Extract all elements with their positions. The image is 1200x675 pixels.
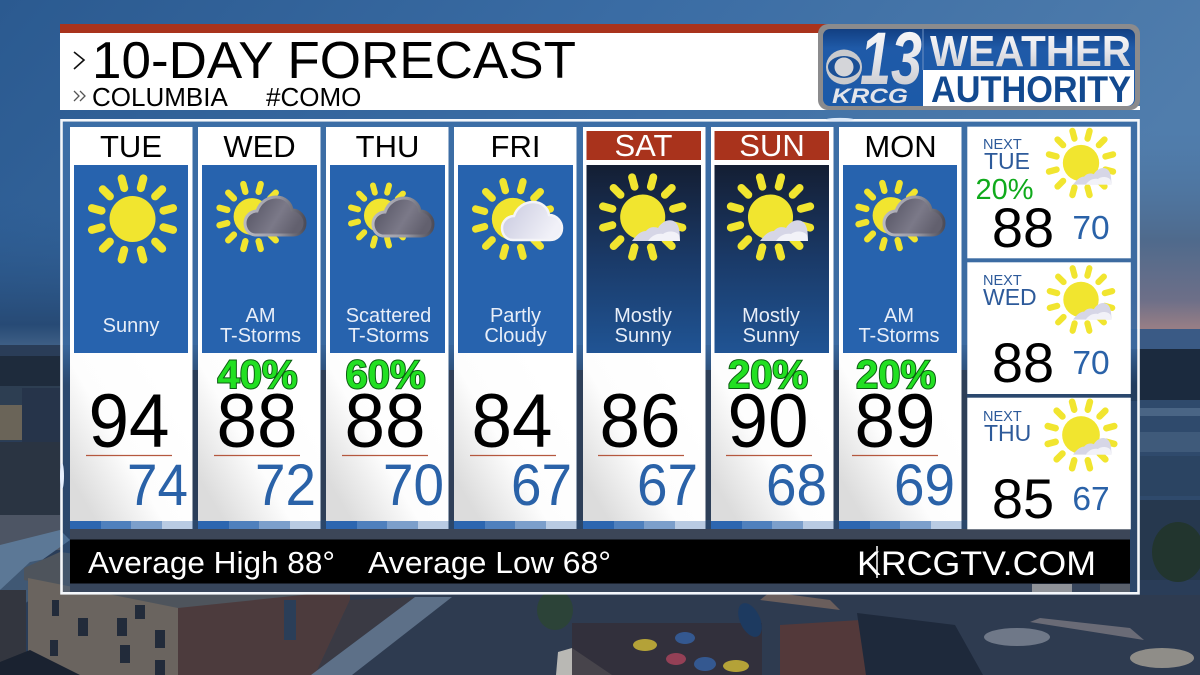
condition panel — [458, 165, 573, 353]
condition text: Sunny — [103, 315, 159, 337]
precipitation chance: 20% — [976, 174, 1034, 206]
channel number: 13 — [860, 17, 922, 100]
high temperature: 88 — [992, 331, 1054, 394]
panel: Tuesday — [70, 127, 192, 529]
WEATHER: WEATHER — [930, 27, 1131, 76]
icon: sun behind storm cloud — [351, 185, 433, 246]
low temperature: 67 — [511, 453, 572, 518]
white title plate — [60, 33, 830, 110]
panel: Monday — [839, 127, 962, 529]
condition text: Sunny — [743, 325, 799, 347]
condition panel — [843, 165, 957, 353]
condition panel — [74, 165, 188, 353]
website: KRCGTV.COM — [857, 545, 1096, 583]
day label: SUN — [739, 128, 805, 163]
station logo — [818, 17, 1140, 110]
panel: next Thursday — [967, 398, 1131, 530]
color strip — [711, 521, 834, 529]
high temperature: 90 — [728, 379, 808, 464]
color strip — [70, 521, 192, 529]
low temperature: 74 — [127, 453, 188, 518]
high temperature: 84 — [472, 379, 552, 464]
day label: FRI — [491, 129, 540, 164]
color strip — [583, 521, 706, 529]
low temperature: 70 — [1072, 345, 1110, 382]
condition text — [614, 305, 672, 347]
low temperature: 70 — [1072, 210, 1110, 247]
weekend day header — [714, 131, 829, 160]
high temperature: 88 — [344, 379, 426, 464]
low temperature: 68 — [766, 453, 827, 518]
condition text — [346, 305, 431, 347]
white frame outline — [62, 120, 1138, 593]
icon: sun behind white cloud — [476, 182, 562, 256]
CBS eye — [826, 50, 862, 84]
color strip — [839, 521, 962, 529]
panel: next Tuesday — [967, 127, 1131, 259]
frame light glints — [60, 118, 854, 489]
condition text: T-Storms — [348, 325, 429, 347]
condition panel — [330, 165, 445, 353]
average low: Average Low 68° — [368, 545, 611, 580]
average high: Average High 88° — [88, 545, 335, 580]
day label: WED — [983, 284, 1037, 310]
condition text: Cloudy — [484, 325, 547, 347]
condition text — [220, 305, 301, 347]
hashtag: #COMO — [266, 82, 361, 112]
icon: sun with small cloud — [1050, 268, 1112, 331]
AUTHORITY: AUTHORITY — [931, 69, 1131, 110]
condition text: Partly — [490, 305, 541, 327]
high temperature: 89 — [854, 379, 936, 464]
condition text — [742, 305, 800, 347]
icon: sun with small cloud — [1049, 131, 1113, 195]
panel: Friday — [454, 127, 576, 529]
panel: next Wednesday — [967, 262, 1131, 394]
color strip — [198, 521, 320, 529]
icon: sun with small cloud — [1048, 402, 1114, 468]
low temperature: 67 — [1072, 481, 1110, 518]
condition panel — [714, 165, 829, 353]
condition text: Sunny — [615, 325, 671, 347]
subtitle arrows — [74, 91, 85, 101]
header banner — [60, 24, 830, 112]
panel: Thursday — [326, 127, 448, 529]
color strip — [454, 521, 576, 529]
day label: TUE — [100, 129, 162, 164]
icon: sun behind storm cloud — [220, 184, 305, 249]
low temperature: 69 — [894, 453, 955, 518]
condition text: Scattered — [346, 305, 431, 327]
day label: THU — [356, 129, 419, 164]
condition text: T-Storms — [220, 325, 301, 347]
color strip — [326, 521, 448, 529]
condition text — [858, 305, 940, 347]
low temperature: 70 — [383, 453, 444, 518]
condition panel — [202, 165, 317, 353]
condition text: AM — [884, 305, 914, 327]
title arrow — [74, 52, 84, 69]
condition text: Mostly — [742, 305, 800, 327]
frame interior — [63, 122, 1137, 592]
high temperature: 88 — [216, 379, 298, 464]
day label: TUE — [984, 148, 1030, 174]
panel: Wednesday — [198, 127, 320, 529]
street and plaza — [311, 590, 1200, 675]
footer bar — [70, 540, 1130, 584]
brick building — [0, 552, 350, 675]
city strip visible inside frame — [70, 370, 1130, 592]
precipitation chance: 40% — [217, 353, 298, 397]
icon: sun with small cloud — [603, 177, 682, 257]
day label: THU — [984, 420, 1031, 446]
high temperature: 86 — [600, 379, 680, 464]
red accent bar — [60, 24, 830, 33]
weekend day header — [586, 131, 701, 160]
panel: Saturday — [583, 127, 706, 529]
day label: SAT — [614, 128, 673, 163]
high temperature: 85 — [992, 467, 1054, 530]
KRCG: KRCG — [832, 85, 908, 108]
precipitation chance: 20% — [856, 353, 936, 397]
high temperature: 88 — [992, 196, 1054, 259]
title: 10-DAY FORECAST — [92, 32, 576, 90]
low temperature: 67 — [637, 453, 698, 518]
next label: NEXT — [983, 137, 1022, 153]
icon: sun behind storm cloud — [859, 183, 944, 248]
condition text — [484, 305, 547, 347]
high temperature: 94 — [88, 379, 170, 464]
condition text: AM — [246, 305, 276, 327]
panel: Sunday — [711, 127, 834, 529]
icon: sun with small cloud — [731, 177, 810, 257]
location subtitle: COLUMBIA — [92, 82, 228, 112]
icon: sun — [92, 178, 173, 260]
low temperature: 72 — [255, 453, 316, 518]
precipitation chance: 20% — [728, 353, 808, 397]
day label: MON — [864, 129, 937, 164]
precipitation chance: 60% — [345, 353, 426, 397]
day label: WED — [223, 129, 296, 164]
condition panel — [586, 165, 701, 353]
condition text: T-Storms — [858, 325, 940, 347]
next label: NEXT — [983, 273, 1022, 289]
condition text: Mostly — [614, 305, 672, 327]
next label: NEXT — [983, 409, 1022, 425]
